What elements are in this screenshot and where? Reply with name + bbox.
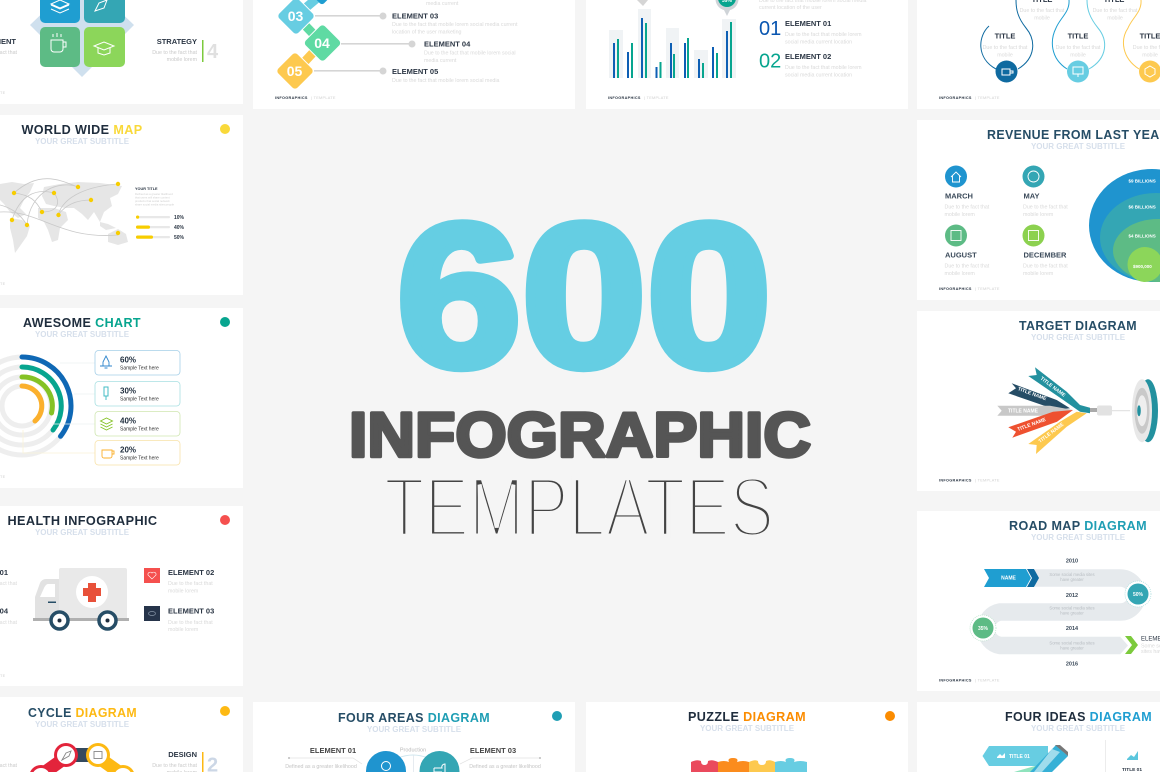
year labels: 2014: [1066, 626, 1079, 632]
panel: numbered diamonds slide: [253, 0, 575, 109]
element labels: ELEMENT 03: [392, 12, 438, 20]
35% badge: 35%: [978, 626, 989, 632]
road captions: [1049, 572, 1095, 650]
footer: | TEMPLATE: [975, 287, 1000, 291]
footer: | TEMPLATE: [644, 96, 669, 100]
bar chart: [609, 9, 736, 78]
element 01: [285, 746, 362, 770]
element labels: media current: [426, 1, 459, 7]
arrow ribbons: TITLE NAME: [1017, 417, 1047, 433]
subtitle: YOUR GREAT SUBTITLE: [367, 725, 462, 734]
strategy label: STRATEGY: [157, 37, 197, 46]
curve labels: mobile: [997, 52, 1013, 58]
element labels: media current: [424, 58, 457, 64]
ambulance: [33, 568, 129, 629]
connector lines: [314, 12, 416, 74]
may item: Due to the fact that: [1023, 204, 1068, 210]
cycle chain: [29, 743, 135, 772]
winding road: [986, 578, 1137, 646]
subtitle: YOUR GREAT SUBTITLE: [35, 720, 130, 729]
card: 60%: Sample Text here: [120, 366, 159, 372]
strategy label: mobile lorem: [167, 57, 198, 63]
element list: ELEMENT 02: [785, 52, 831, 61]
design label: DESIGN: [168, 750, 197, 759]
map legend: [135, 187, 185, 241]
panel: road map diagram: [917, 511, 1160, 691]
name arrow: NAME: [1001, 576, 1017, 582]
footer: TE: [0, 674, 6, 678]
august item: [944, 224, 990, 277]
footer: | TEMPLATE: [311, 96, 336, 100]
may item: mobile lorem: [1023, 212, 1054, 218]
target disc: [1132, 379, 1158, 442]
nested circles chart: $6 BILLIONS: [1128, 204, 1156, 210]
curve labels: mobile: [1142, 52, 1158, 58]
element labels: Due to the fact that mobile lorem social: [424, 50, 516, 56]
cropped element label: [0, 37, 18, 95]
footer: INFOGRAPHICS: [939, 678, 972, 682]
arrow ribbons: TITLE NAME: [1038, 421, 1066, 445]
page marker: [220, 124, 230, 134]
element labels: location of the user marketing: [392, 30, 462, 36]
element 03: Due to the fact that: [168, 620, 213, 626]
page marker: [220, 317, 230, 327]
year labels: [1066, 558, 1079, 668]
curve labels: mobile: [1070, 52, 1086, 58]
diamond chain: 04: [314, 35, 330, 51]
nested circles chart: $900,000: [1133, 264, 1152, 269]
cropped element label: TE: [0, 91, 6, 95]
panel: four areas diagram: [253, 702, 575, 772]
august item: Due to the fact that: [944, 264, 990, 270]
road captions: Some social media sites: [1049, 606, 1095, 610]
card: 20%: [95, 440, 180, 465]
august item: AUGUST: [945, 250, 977, 260]
panel: four ideas diagram: [917, 702, 1160, 772]
card: 20%: 20%: [120, 446, 136, 454]
headline: TEMPLATES: TEMPLATES: [384, 460, 774, 554]
footer: INFOGRAPHICS: [939, 478, 972, 482]
footer: [275, 96, 336, 100]
subtitle: YOUR GREAT SUBTITLE: [35, 330, 130, 339]
march item: MARCH: [945, 192, 973, 200]
strategy label: [152, 37, 219, 63]
winding curves: [981, 0, 1141, 69]
nested circles chart: $4 BILLIONS: [1128, 234, 1156, 238]
year labels: 2010: [1066, 558, 1078, 564]
nested circles chart: $9 BILLIONS: [1128, 178, 1156, 184]
idea column: [1105, 740, 1142, 772]
footer: TE: [0, 282, 6, 286]
curve labels: Due to the fact that: [1020, 8, 1065, 14]
element list: current location of the user: [759, 5, 822, 11]
subtitle: YOUR GREAT SUBTITLE: [35, 528, 130, 537]
headline: 600: 600: [396, 182, 772, 410]
diamond chain: 03: [288, 8, 303, 24]
headline: INFOGRAPHIC: INFOGRAPHIC: [349, 400, 811, 470]
element list: 02: [759, 50, 781, 72]
card: 60%: [95, 350, 180, 375]
chart connectors: [23, 363, 95, 453]
area circles: Production: [400, 748, 426, 754]
pencil and banner: [982, 745, 1068, 772]
arrow ribbons: TITLE NAME: [1008, 408, 1039, 414]
element 01: Defined as a greater likelihood: [285, 764, 357, 770]
element labels: Due to the fact that mobile lorem social media: [392, 78, 500, 84]
year labels: 2012: [1066, 593, 1078, 599]
footer: INFOGRAPHICS: [939, 287, 972, 291]
35% badge: [970, 615, 996, 641]
subtitle: YOUR GREAT SUBTITLE: [1031, 724, 1126, 733]
panel: strategy tiles slide: [0, 0, 243, 104]
element list: ELEMENT 01: [785, 19, 831, 28]
element list: Due to the fact that mobile lorem: [785, 32, 862, 38]
december item: mobile lorem: [1023, 271, 1054, 277]
panel: curves slide: [917, 0, 1160, 109]
footer: | TEMPLATE: [975, 96, 1000, 100]
road captions: have greater: [1060, 610, 1084, 616]
element 01: ELEMENT 01: [310, 746, 356, 755]
card: 30%: 30%: [120, 386, 136, 396]
chart pins: [637, 0, 738, 16]
element list: Due to the fact that mobile lorem: [785, 65, 862, 71]
element list: social media current location: [785, 72, 852, 78]
element 02: Due to the fact that: [168, 581, 213, 587]
title: FOUR IDEAS DIAGRAM: [1005, 709, 1152, 724]
march item: mobile lorem: [944, 212, 975, 218]
december item: Due to the fact that: [1023, 264, 1068, 270]
page marker: [552, 711, 562, 721]
arrow ribbons: [997, 367, 1090, 454]
nested circles chart: [1089, 169, 1160, 282]
element list: 01: [759, 18, 781, 40]
subtitle: YOUR GREAT SUBTITLE: [700, 724, 795, 733]
element list: [759, 0, 867, 78]
may item: [1022, 166, 1068, 218]
card: 40%: 40%: [120, 416, 136, 426]
title: HEALTH INFOGRAPHIC: [8, 513, 158, 528]
map legend: that users will share content: [135, 196, 170, 200]
50% badge: 50%: [1133, 592, 1144, 598]
curve labels: mobile: [1034, 16, 1050, 22]
arrow ribbons: TITLE NAME: [1017, 386, 1048, 402]
pencil and banner: TITLE 01: [1009, 754, 1030, 760]
strategy label: Due to the fact that: [152, 50, 198, 56]
subtitle: YOUR GREAT SUBTITLE: [1031, 142, 1126, 151]
element 03: mobile lorem: [168, 627, 199, 633]
puzzle pieces: [691, 758, 807, 772]
element 02: ELEMENT 02: [168, 568, 214, 577]
march item: Due to the fact that: [944, 204, 990, 210]
footer: [939, 478, 1000, 482]
title: PUZZLE DIAGRAM: [688, 709, 806, 724]
title: TARGET DIAGRAM: [1019, 318, 1137, 333]
curve labels: Due to the fact that: [1056, 45, 1101, 51]
footer: [939, 678, 1000, 682]
map legend: Defined as a greater likelihood: [135, 192, 173, 196]
curve labels: Due to the fact that: [1093, 8, 1138, 14]
footer: INFOGRAPHICS: [275, 96, 308, 100]
card: 20%: Sample Text here: [120, 456, 159, 462]
element 03: Defined as a greater likelihood: [469, 764, 541, 770]
element labels: [392, 1, 518, 84]
panel: awesome chart: [0, 308, 243, 488]
title: WORLD WIDE MAP: [22, 122, 142, 137]
subtitle: YOUR GREAT SUBTITLE: [1031, 333, 1126, 342]
may item: MAY: [1024, 192, 1039, 200]
element 03: [144, 606, 214, 633]
card: 40%: [95, 412, 180, 436]
footer: [939, 96, 1000, 100]
curve labels: TITLE: [1068, 32, 1088, 40]
element labels: Due to the fact that mobile lorem social media current: [392, 22, 518, 28]
page marker: [220, 515, 230, 525]
subtitle: YOUR GREAT SUBTITLE: [1031, 533, 1126, 542]
element labels: ELEMENT 04: [424, 40, 471, 48]
map legend: 40%: [174, 225, 185, 231]
august item: mobile lorem: [944, 271, 975, 277]
map legend: share social media sites people: [135, 202, 174, 206]
element 03: [460, 746, 541, 770]
dart: [1090, 406, 1130, 416]
road captions: Some social media sites: [1049, 572, 1095, 577]
diamond chain: [275, 0, 342, 91]
map legend: 10%: [174, 215, 185, 221]
card: 40%: Sample Text here: [120, 426, 159, 432]
road captions: have greater: [1060, 577, 1084, 582]
diamond chain: 05: [287, 63, 302, 79]
curve labels: [983, 0, 1160, 58]
curve circles and icons: [996, 60, 1160, 82]
map: [0, 179, 128, 253]
element list: social media current location: [785, 40, 852, 46]
50% badge: [1125, 581, 1151, 607]
subtitle: YOUR GREAT SUBTITLE: [35, 137, 130, 146]
name arrow: [984, 569, 1039, 587]
map legend: products that social network: [135, 199, 170, 203]
strategy label: 4: [207, 41, 219, 63]
panel: bar chart slide: [586, 0, 908, 109]
element 02: [144, 568, 214, 594]
curve labels: TITLE: [1140, 32, 1160, 40]
curve labels: Due to the fact that: [983, 45, 1028, 51]
footer: TE: [0, 475, 6, 479]
curve labels: TITLE: [995, 32, 1015, 40]
map legend: YOUR TITLE: [135, 187, 158, 191]
design label: Due to the fact that: [152, 763, 198, 769]
tile diagram: [30, 0, 134, 77]
footer: INFOGRAPHICS: [939, 96, 972, 100]
footer: | TEMPLATE: [975, 678, 1000, 682]
december item: DECEMBER: [1024, 250, 1067, 260]
title: ROAD MAP DIAGRAM: [1009, 518, 1147, 533]
element 03: ELEMENT 03: [168, 606, 214, 616]
page marker: [885, 711, 895, 721]
footer: | TEMPLATE: [975, 478, 1000, 482]
card: 30%: [95, 382, 180, 406]
year labels: 2016: [1066, 662, 1078, 668]
footer: INFOGRAPHICS: [608, 96, 641, 100]
element 02: mobile lorem: [168, 588, 199, 594]
footer: [608, 96, 669, 100]
area circles: [366, 748, 460, 772]
title: CYCLE DIAGRAM: [28, 705, 137, 720]
december item: [1022, 224, 1068, 277]
title: FOUR AREAS DIAGRAM: [338, 710, 490, 725]
card: 60%: 60%: [120, 356, 136, 364]
panel: puzzle diagram: [586, 702, 908, 772]
end chevron and element: [1120, 636, 1160, 655]
road captions: have greater: [1060, 646, 1084, 650]
card: 30%: Sample Text here: [120, 396, 159, 402]
page marker: [220, 706, 230, 716]
cropped left elements: [0, 568, 18, 626]
radial chart: [0, 357, 71, 455]
panel: world wide map: [0, 115, 243, 295]
panel: cycle diagram: [0, 697, 243, 772]
road captions: Some social media sites: [1049, 640, 1095, 646]
title: AWESOME CHART: [23, 315, 141, 330]
map legend: 50%: [174, 235, 185, 241]
element 03: ELEMENT 03: [470, 746, 516, 755]
panel: target diagram: [917, 311, 1160, 491]
design label: [152, 750, 218, 772]
panel: health infographic: [0, 506, 243, 686]
element labels: ELEMENT 05: [392, 67, 438, 76]
arrow ribbons: TITLE NAME: [1039, 376, 1067, 399]
curve labels: mobile: [1107, 16, 1123, 22]
march item: [944, 166, 990, 218]
panel: revenue from last year: [917, 120, 1160, 300]
footer: [939, 287, 1000, 291]
